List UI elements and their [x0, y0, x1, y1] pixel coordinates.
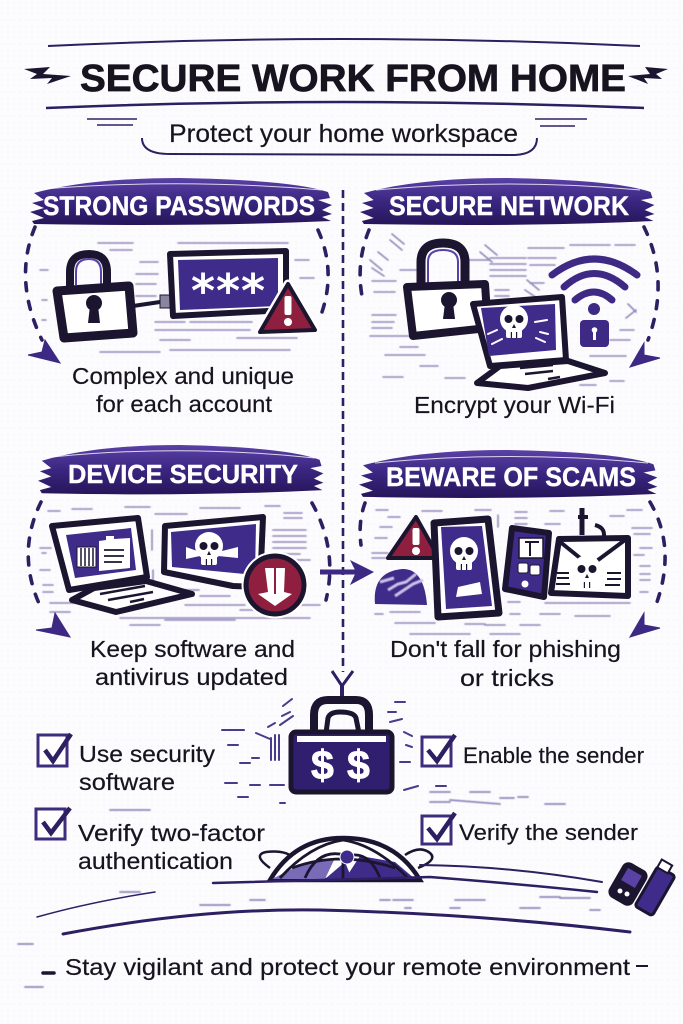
sketch texture ticks [18, 792, 600, 987]
panel: secure network [360, 178, 660, 418]
sketch texture lines [40, 506, 320, 625]
panel: device security [28, 445, 330, 690]
checkbox: enable the sender [422, 735, 644, 768]
caption: antivirus updated [95, 664, 288, 690]
heading banner: strong passwords [30, 178, 332, 225]
checkbox: verify two-factor: Verify two-factor [78, 820, 265, 846]
checkbox: use security software: software [79, 769, 175, 795]
header: title block [24, 39, 668, 108]
checkbox: enable the sender: Enable the sender [463, 743, 644, 768]
icon: phishing envelope [551, 508, 628, 596]
icon: globe [375, 569, 427, 605]
icon: usb drives [606, 860, 675, 916]
caption [72, 363, 294, 417]
horizon lines [37, 865, 630, 934]
icon: warning triangle [388, 517, 439, 558]
icon: warning triangle [260, 284, 315, 332]
dashed arc arrow [360, 502, 665, 637]
icon: phone [505, 528, 549, 597]
caption [390, 636, 621, 691]
dollar signs: $$ [311, 742, 370, 788]
connector [133, 302, 160, 306]
footer message: Stay vigilant and protect your remote environment [65, 954, 631, 980]
icon: padlock [407, 243, 488, 336]
subtitle: Protect your home workspace [169, 120, 518, 148]
checkbox: use security software [38, 734, 216, 795]
sketch texture lines [372, 510, 652, 634]
caption: or tricks [460, 665, 554, 691]
heading banner: beware of scams: BEWARE OF SCAMS [386, 462, 636, 492]
icon: padlock [57, 254, 133, 338]
arrow: device security to beware of scams [320, 560, 374, 585]
icon: left lightning [24, 67, 71, 84]
heading banner: secure network: SECURE NETWORK [389, 191, 629, 221]
checkbox: verify two-factor: authentication [78, 848, 233, 874]
subtitle [87, 119, 587, 155]
sketch texture lines [40, 243, 314, 352]
icon: monitor with skull [164, 517, 263, 587]
icon: laptop with skull [473, 297, 605, 388]
icon: alert circle [242, 552, 308, 618]
center dashed divider [342, 190, 344, 672]
caption: Keep software and [90, 636, 295, 662]
heading banner: beware of scams [359, 450, 657, 498]
caption [90, 636, 295, 690]
sketch texture lines [370, 234, 636, 385]
caption: Encrypt your Wi-Fi [414, 392, 615, 418]
connector into central lock [332, 671, 353, 699]
heading banner: device security [38, 445, 323, 494]
sketch ticks around padlock [222, 699, 446, 803]
icon: wifi with lock [552, 259, 637, 347]
icon: password field: *** [191, 264, 265, 318]
panel: strong passwords [26, 178, 332, 417]
dashed arc arrow [360, 227, 660, 367]
dashed arc arrow [26, 227, 328, 363]
icon: password field [170, 251, 286, 318]
heading banner: secure network [360, 178, 654, 225]
title: SECURE WORK FROM HOME [80, 58, 626, 100]
checkbox: use security software: Use security [79, 741, 216, 767]
icon: right lightning [628, 67, 668, 84]
icon: tablet with skull [434, 519, 499, 617]
icon: globe on horizon [260, 838, 432, 880]
checklist right [422, 735, 644, 845]
checkbox: verify two-factor [36, 808, 265, 874]
caption: for each account [96, 391, 273, 417]
caption: Don't fall for phishing [390, 636, 621, 662]
heading banner: strong passwords: STRONG PASSWORDS [43, 191, 315, 221]
checkbox: verify the sender: Verify the sender [459, 820, 638, 845]
checkbox: verify the sender [422, 813, 638, 845]
icon: laptop [52, 518, 192, 612]
checklist left [36, 734, 265, 874]
heading banner: device security: DEVICE SECURITY [68, 459, 298, 489]
panel: beware of scams [359, 450, 665, 691]
dashed arc arrow [28, 502, 330, 637]
caption: Complex and unique [72, 363, 294, 389]
icon: central padlock with dollars [222, 699, 446, 803]
